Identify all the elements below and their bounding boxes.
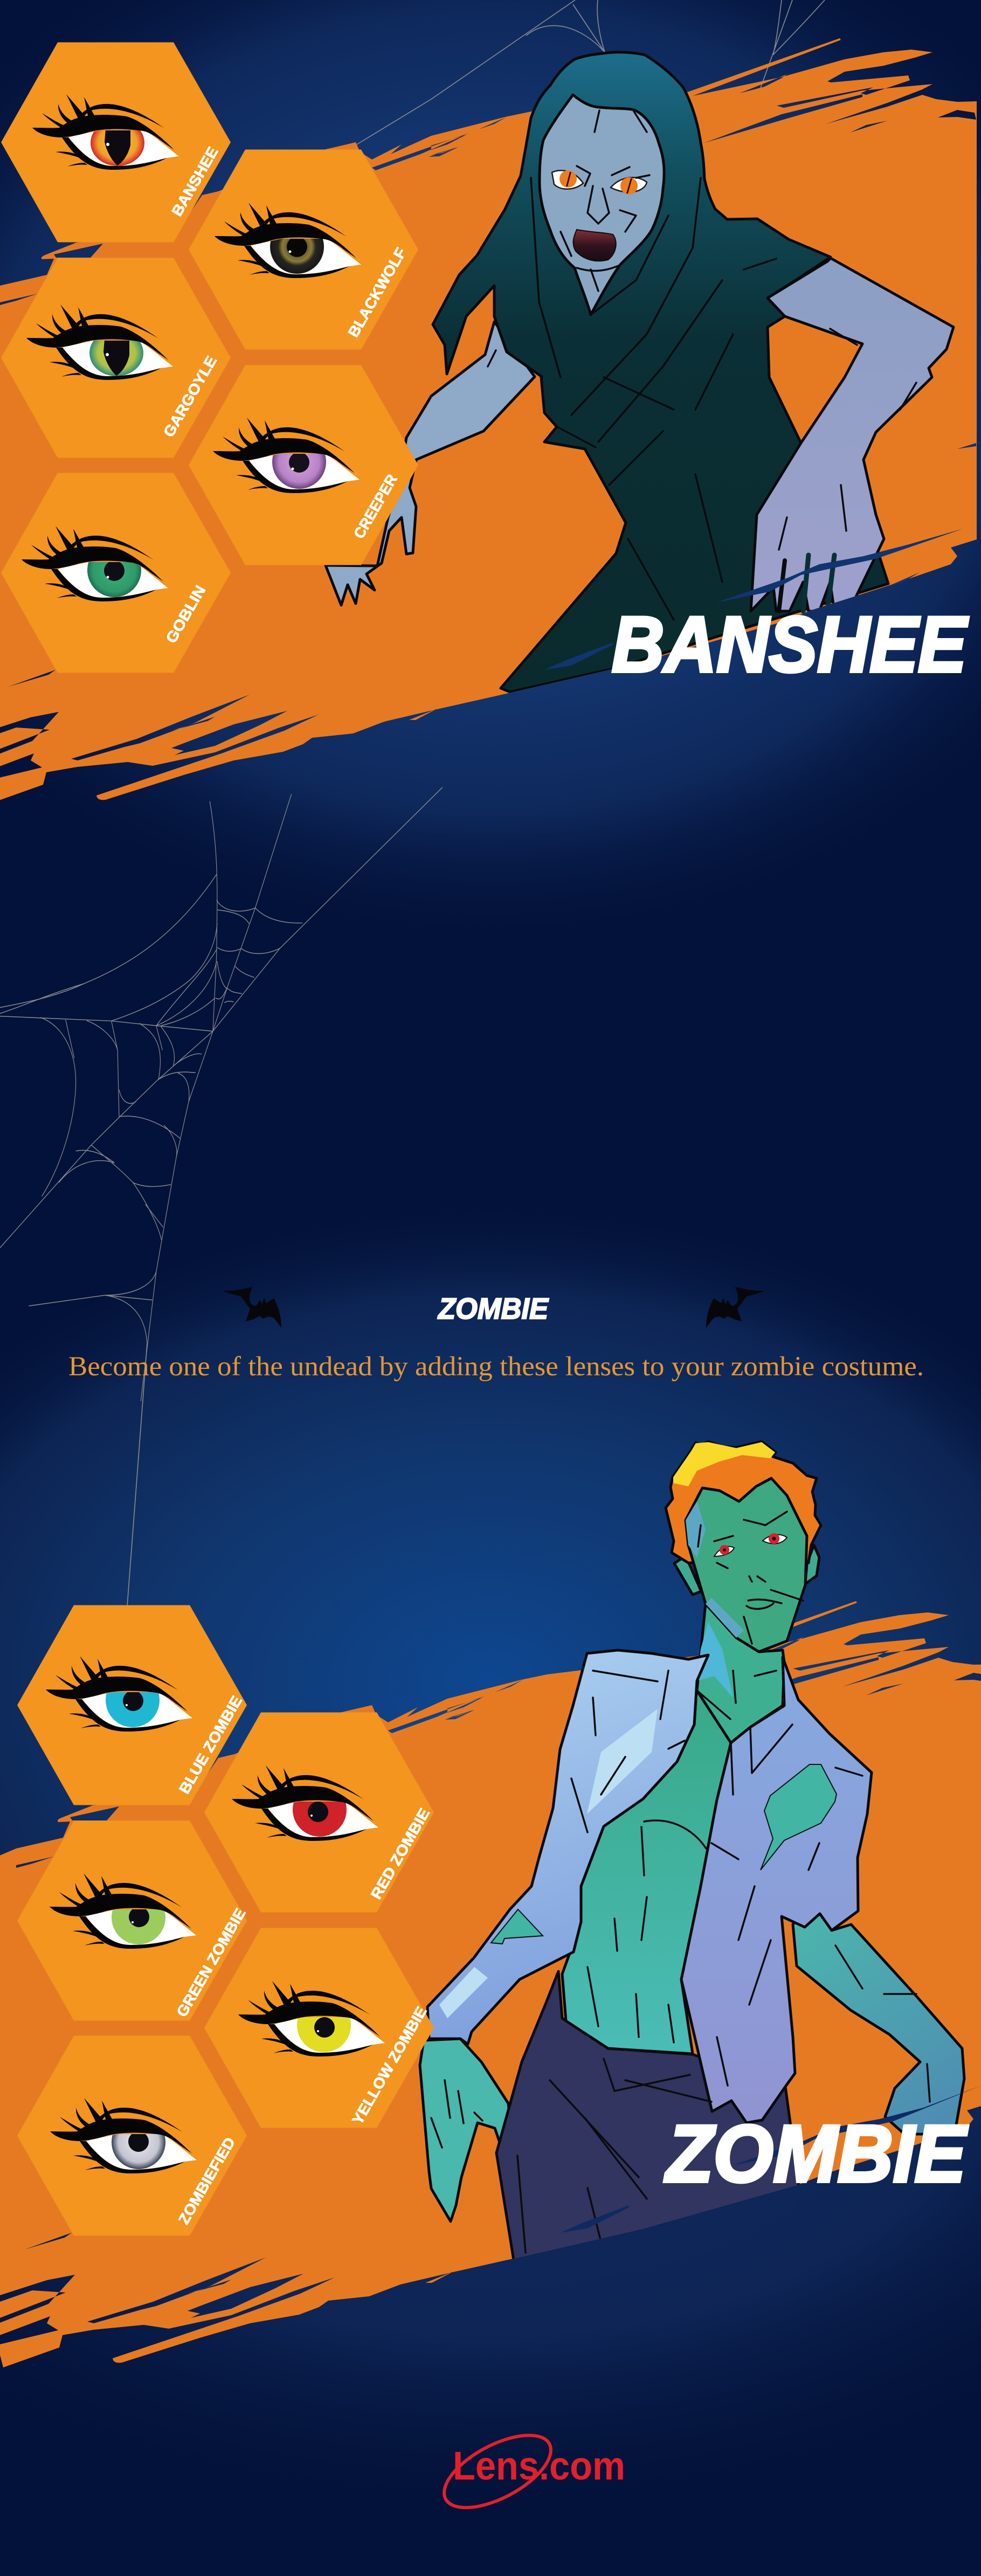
- spider web: large centre-left: [0, 787, 443, 1401]
- zombie torso: [562, 1681, 731, 2054]
- banshee figure: [326, 52, 954, 692]
- hexagon: Yellow Zombie lens: [204, 1928, 434, 2128]
- hexagon: Gargoyle lens: GARGOYLE: [160, 353, 220, 440]
- hexagon: Green Zombie lens: [17, 1820, 249, 2021]
- spider thread down to first zombie hexagon: [127, 1343, 147, 1606]
- zombie body ink lines: [431, 1671, 930, 2253]
- hexagon: Blackwolf lens: [189, 150, 418, 349]
- hexagon: Green Zombie lens: GREEN ZOMBIE: [173, 1906, 249, 2020]
- bat: right: [706, 1287, 765, 1328]
- hexagon: Red Zombie lens: [204, 1713, 434, 1912]
- description text: Become one of the undead by adding these lenses to your zombie costume.: [68, 1352, 924, 1382]
- banshee left arm and hand: [326, 322, 535, 605]
- hexagon: Creeper lens: CREEPER: [350, 472, 400, 542]
- hexagon: Banshee lens: BANSHEE: [168, 144, 222, 219]
- zombie torn shirt patches: [491, 1764, 837, 1944]
- hexagon: Creeper lens: [189, 365, 418, 565]
- banshee lens hexagons: [1, 42, 418, 673]
- heading: Zombie: ZOMBIE: [664, 2108, 968, 2199]
- banshee hood and robe: [433, 52, 888, 692]
- logo: Lens.com: [433, 2421, 625, 2522]
- zombie left hand: [420, 2039, 514, 2221]
- zombie face: [686, 1478, 807, 1652]
- zombie right arm: [793, 1899, 964, 2134]
- zombie trousers: [496, 1971, 803, 2263]
- zombie open shirt: left panel and sleeve: [427, 1650, 708, 2044]
- hexagon: Banshee lens: [1, 42, 231, 243]
- logo: Lens.com: Lens.com: [453, 2443, 625, 2488]
- hexagon: Goblin lens: [1, 473, 231, 673]
- hexagon: Zombiefied lens: ZOMBIEFIED: [175, 2135, 238, 2227]
- bat: left: [223, 1287, 281, 1328]
- zombie figure: [420, 1442, 964, 2263]
- zombie hair: [666, 1442, 821, 1563]
- hexagon: Blackwolf lens: BLACKWOLF: [345, 245, 409, 340]
- banshee right arm and clawed hand: [751, 258, 954, 611]
- zombie face ink lines: [693, 1512, 803, 1719]
- zombie hair highlight: [673, 1442, 775, 1486]
- zombie brush splash: [0, 1601, 981, 2367]
- hexagon: Zombiefied lens: [17, 2036, 247, 2235]
- hexagon: Blue Zombie lens: [17, 1605, 247, 1805]
- banshee open mouth: [574, 230, 616, 261]
- banshee brush splash: [0, 38, 977, 805]
- zombie eyes: [714, 1533, 787, 1556]
- banshee ink lines: [488, 110, 916, 620]
- zombie foreground navy streaks: [561, 2086, 981, 2233]
- banshee eyes: [552, 170, 647, 195]
- zombie shirt highlight: [439, 1709, 658, 2018]
- hexagon: Red Zombie lens: RED ZOMBIE: [368, 1805, 433, 1902]
- hexagon: Blue Zombie lens: BLUE ZOMBIE: [176, 1693, 245, 1797]
- zombie ears: [674, 1545, 819, 1595]
- hexagon: Gargoyle lens: [1, 258, 231, 458]
- hexagon: Yellow Zombie lens: YELLOW ZOMBIE: [349, 2004, 430, 2127]
- zombie open shirt: right panel and sleeve: [681, 1657, 872, 2123]
- zombie lens hexagons: [17, 1605, 434, 2235]
- subheading: Zombie: ZOMBIE: [437, 1292, 549, 1325]
- banshee face and neck: [540, 95, 664, 315]
- spider web: top right: [357, 0, 825, 144]
- hexagon: Goblin lens: GOBLIN: [163, 583, 209, 646]
- zombie neck: [697, 1604, 784, 1743]
- banshee foreground navy streaks: [544, 443, 976, 670]
